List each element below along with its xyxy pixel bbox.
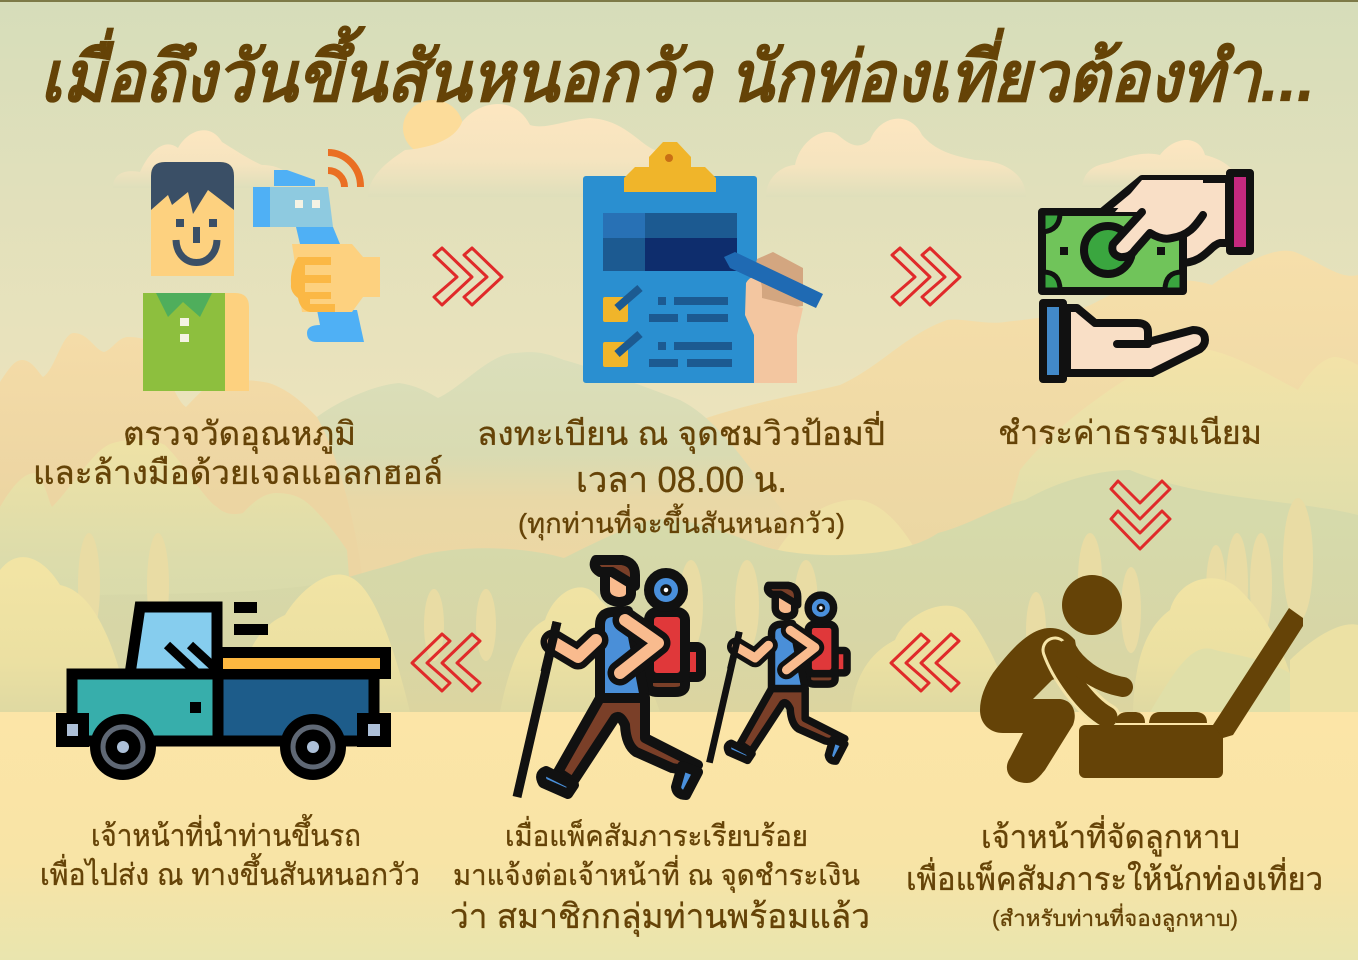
step 4 icon: porter packing a suitcase	[980, 575, 1303, 783]
step 2 caption: (ทุกท่านที่จะขึ้นสันหนอกวัว)	[518, 503, 845, 541]
step 5 caption	[450, 816, 870, 937]
step 5 icon: small hiker	[709, 585, 847, 763]
step 5 icon: large hiker	[517, 560, 701, 797]
step 2 caption: ลงทะเบียน ณ จุดชมวิวป้อมปี่	[477, 411, 885, 454]
step 4 caption: เจ้าหน้าที่จัดลูกหาบ	[981, 815, 1240, 857]
step 6 caption: เพื่อไปส่ง ณ ทางขึ้นสันหนอกวัว	[40, 853, 420, 892]
arrow: step 3 to step 4	[1111, 481, 1170, 549]
step 6 icon: pickup truck	[56, 602, 391, 780]
arrow: step 1 to step 2	[434, 248, 502, 305]
step 6 caption	[40, 814, 420, 892]
step 5 caption: มาแจ้งต่อเจ้าหน้าที่ ณ จุดชำระเงิน	[453, 855, 860, 893]
step 3 caption: ชำระค่าธรรมเนียม	[998, 414, 1262, 451]
step 1 icon: person with thermometer	[143, 152, 380, 391]
step 4 caption	[906, 815, 1323, 932]
arrow: step 4 to step 5	[891, 634, 959, 691]
step 1 caption: และล้างมือด้วยเจลแอลกฮอล์	[33, 454, 443, 491]
step 4 caption: (สำหรับท่านที่จองลูกหาบ)	[992, 903, 1238, 932]
arrow: step 2 to step 3	[892, 248, 960, 305]
step 6 caption: เจ้าหน้าที่นำท่านขึ้นรถ	[91, 814, 361, 853]
arrow: step 5 to step 6	[412, 634, 480, 691]
step 5 caption: เมื่อแพ็คสัมภาระเรียบร้อย	[505, 816, 808, 853]
step 1 caption: ตรวจวัดอุณหภูมิ	[123, 415, 356, 454]
step 5 caption: ว่า สมาชิกกลุ่มท่านพร้อมแล้ว	[450, 898, 870, 937]
step 4 caption: เพื่อแพ็คสัมภาระให้นักท่องเที่ยว	[906, 857, 1323, 897]
step 3 icon: paying with money	[1042, 173, 1250, 379]
step 2 caption: เวลา 08.00 น.	[576, 459, 787, 500]
step 1 caption	[33, 415, 443, 491]
step 2 caption	[477, 411, 885, 541]
step 2 icon: clipboard	[583, 142, 823, 383]
